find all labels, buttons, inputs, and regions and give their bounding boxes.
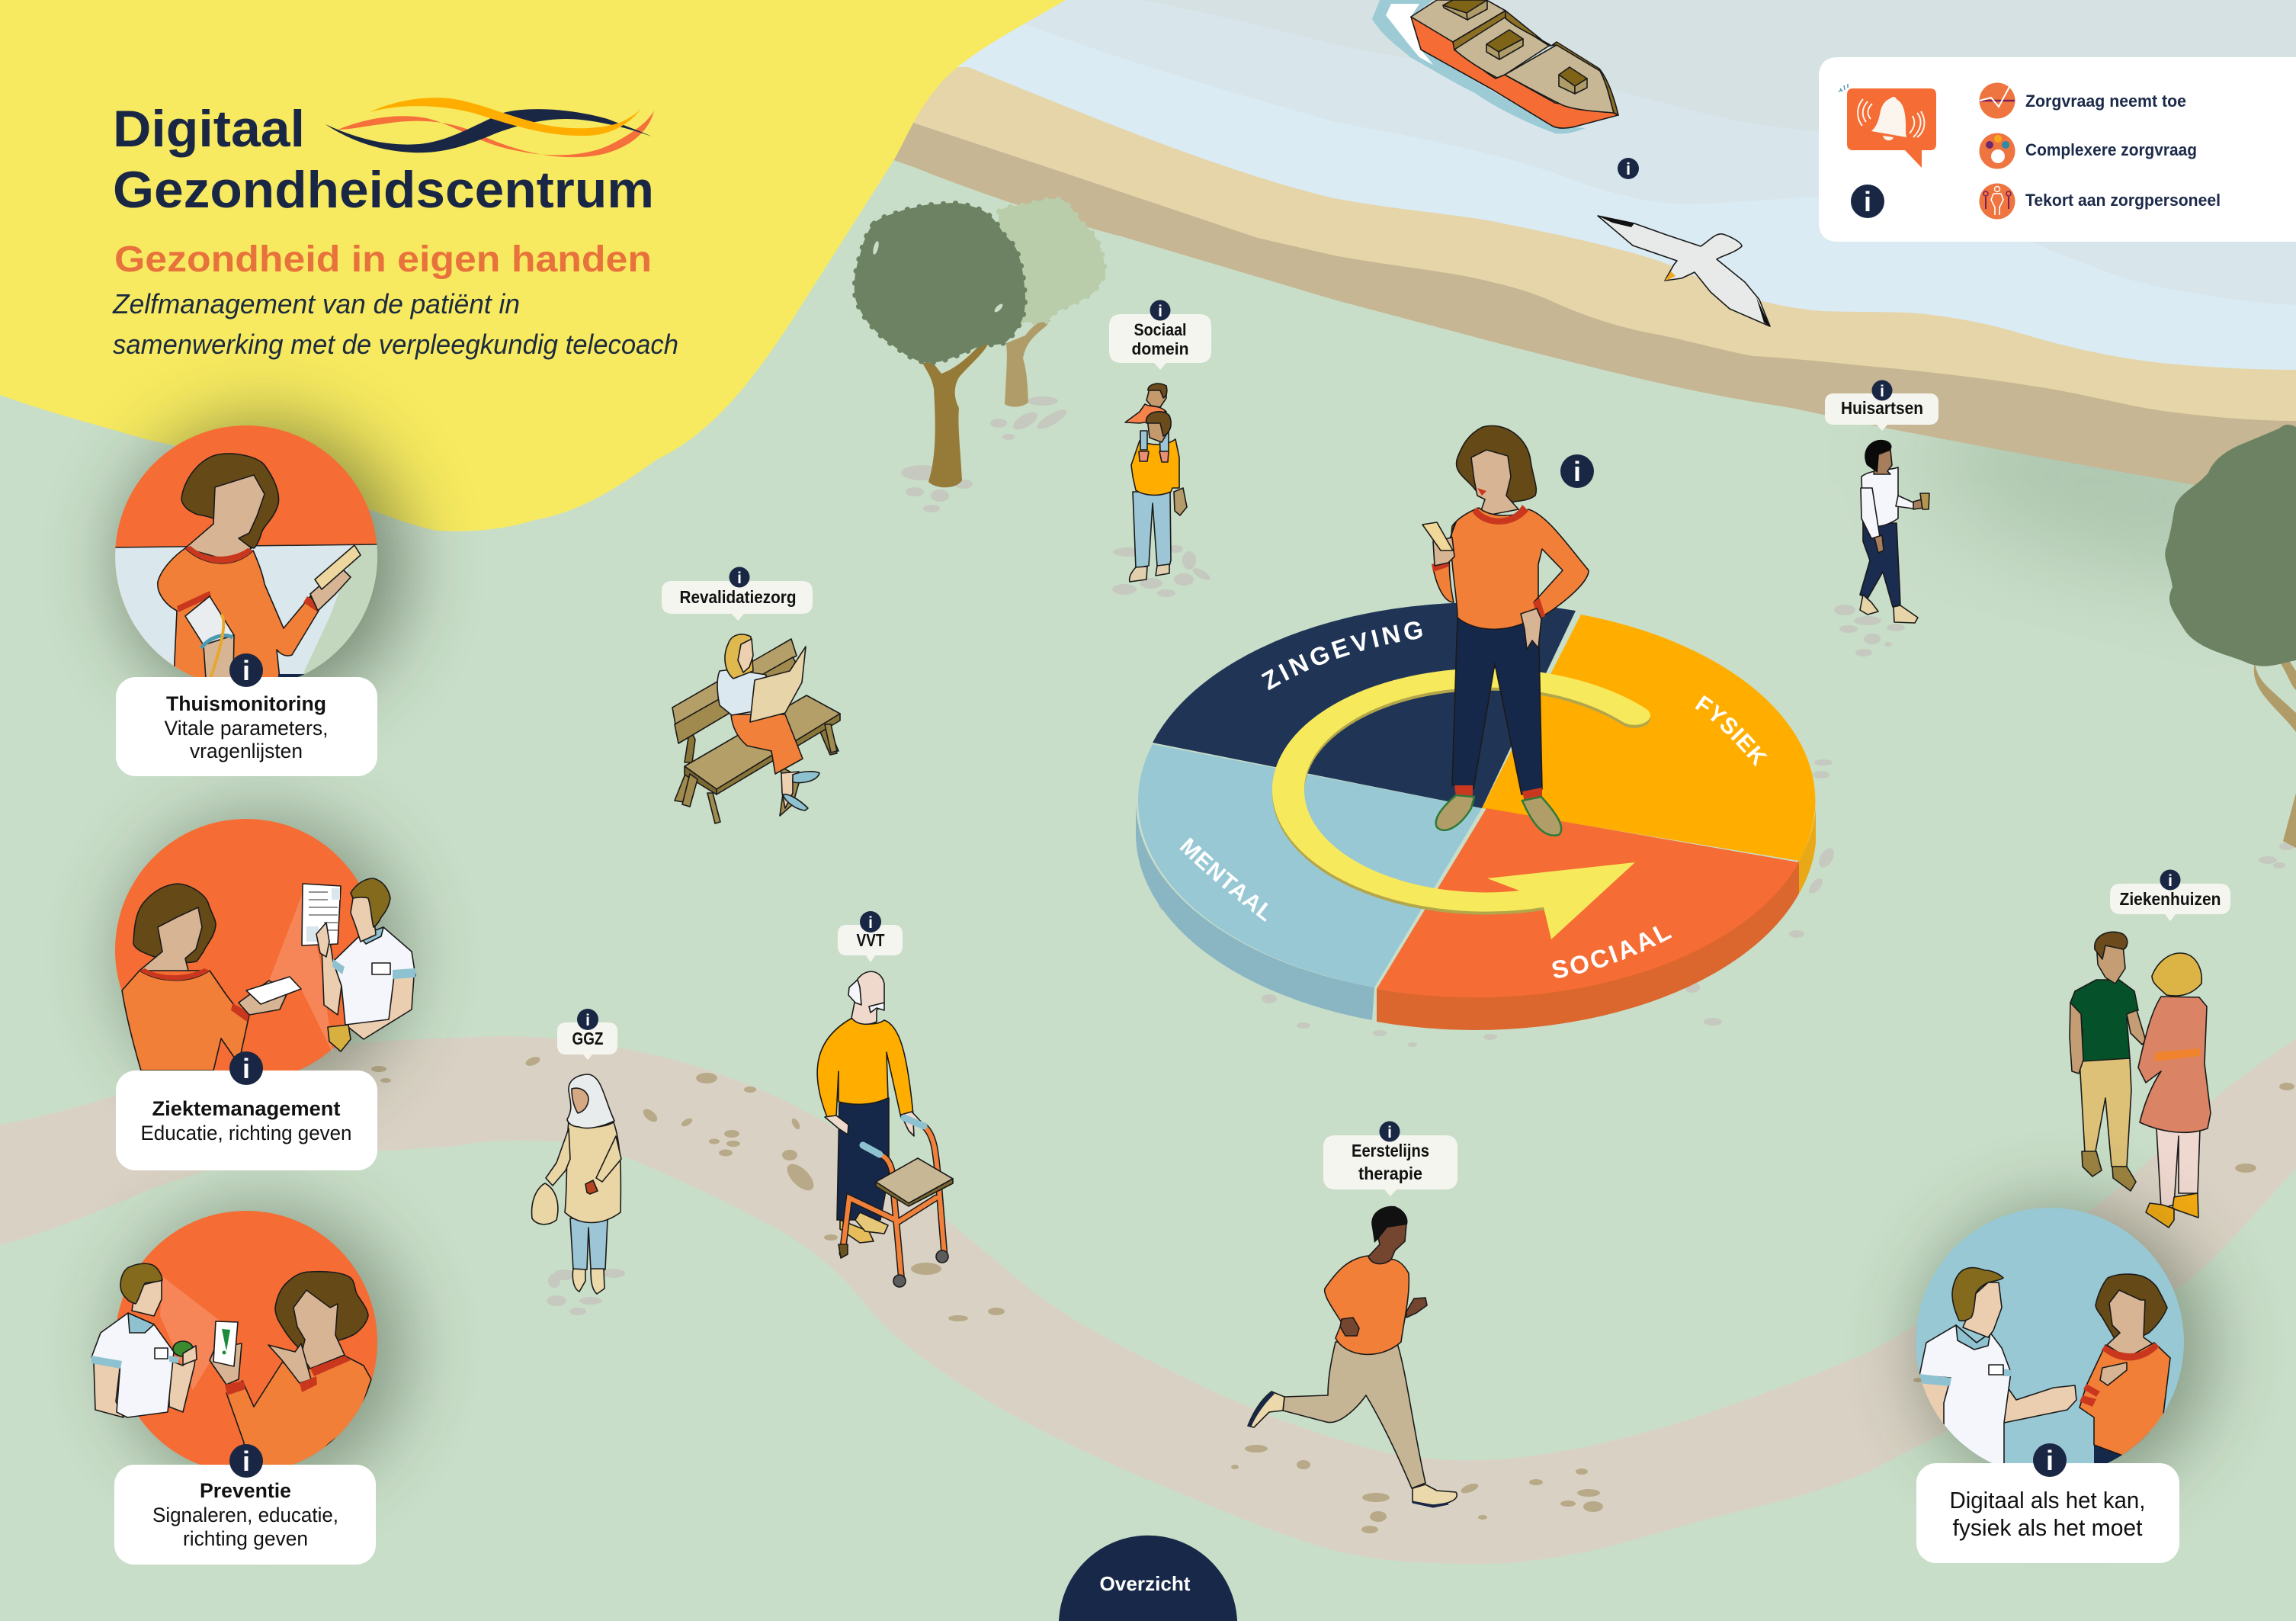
label: huisartsen: [1825, 380, 1938, 431]
shadow: preventie: [122, 1209, 404, 1491]
card heading: Ziektemanagement: [152, 1097, 340, 1120]
nurse: [1919, 1268, 2076, 1468]
panel: preventie: [91, 1211, 377, 1565]
segment: zingeving: [1153, 602, 1576, 808]
card text: Vitale parameters,: [165, 717, 328, 740]
overzicht button: [1059, 1536, 1237, 1621]
label: sociaal domein: domein: [1131, 339, 1189, 358]
figure: couple, man and woman: [2070, 932, 2211, 1228]
label: eerstelijns therapie: [1323, 1121, 1457, 1196]
tree: back tree light: [999, 199, 1105, 407]
tagline line 1: Zelfmanagement van de patiënt in: [112, 288, 520, 319]
label: ggz: [557, 1009, 617, 1060]
arrow head: [1487, 862, 1635, 939]
label: eerstelijns therapie: Eerstelijns: [1352, 1141, 1429, 1160]
label: eerstelijns therapie: i: [1387, 1124, 1392, 1141]
newspaper: [750, 647, 806, 722]
main woman on disk: [1422, 425, 1589, 836]
legend text 1: Zorgvraag neemt toe: [2025, 91, 2186, 111]
info badge: [229, 1051, 263, 1085]
label: ziekenhuizen: Ziekenhuizen: [2119, 889, 2221, 909]
walker: [842, 1118, 944, 1282]
card text: Digitaal als het kan,: [1950, 1487, 2145, 1513]
bench: [672, 639, 840, 823]
nurse: [302, 878, 415, 1051]
legend text 3: Tekort aan zorgpersoneel: [2025, 191, 2221, 210]
card text line 2: vragenlijsten: [190, 740, 303, 762]
circle: [1916, 1208, 2184, 1476]
card heading: Preventie: [200, 1479, 291, 1502]
pie disk: [1136, 602, 1816, 1030]
segment: mentaal: [1138, 744, 1482, 987]
circle: [115, 819, 377, 1081]
label: ggz: i: [585, 1012, 590, 1029]
hair and face: [725, 634, 753, 679]
label: revalidatiezorg: [662, 567, 813, 621]
figure: elderly man with walker: [817, 971, 953, 1287]
figure: woman walking with cup: [1860, 440, 1929, 623]
figure: parent with child on shoulders: [1125, 384, 1187, 582]
info badge: i: [242, 1446, 250, 1477]
label: mentaal: MENTAAL: [1179, 837, 1268, 922]
info badge: [229, 653, 263, 687]
logo title: [112, 98, 678, 360]
info badge: [229, 1444, 263, 1478]
subheading: Gezondheid in eigen handen: [114, 239, 652, 280]
light beam: [269, 893, 333, 1054]
seagull: [1598, 216, 1770, 326]
yellow title background shape: [0, 0, 1066, 531]
heading line 2: Gezondheidscentrum: [113, 161, 654, 219]
shoes: [1436, 795, 1474, 830]
info badge: main woman: i: [1573, 456, 1581, 487]
woman: [2157, 1128, 2200, 1209]
label: sociaal domein: Sociaal: [1134, 320, 1186, 339]
figure: woman with headscarf and bag: [532, 1074, 621, 1294]
card text line 2: richting geven: [183, 1527, 308, 1550]
hand on hip: [1521, 608, 1541, 650]
tagline line 2: samenwerking met de verpleegkundig telecoach: [113, 329, 678, 360]
segment: sociaal: [1377, 808, 1799, 997]
logo swoosh: [325, 98, 654, 157]
man: [2080, 1058, 2131, 1167]
overzicht button: Overzicht: [1099, 1572, 1191, 1595]
legend panel: [1819, 57, 2296, 242]
card text line 2: fysiek als het moet: [1953, 1514, 2143, 1541]
text card: [114, 1465, 376, 1565]
info badge: i: [242, 1053, 250, 1084]
label: huisartsen: i: [1880, 383, 1884, 400]
panel: digitaal als het kan: [1916, 1208, 2184, 1563]
label: ggz: GGZ: [572, 1029, 604, 1048]
label: vvt: [838, 911, 903, 962]
panel: ziektemanagement: [115, 819, 415, 1170]
label: vvt: VVT: [857, 930, 884, 950]
heading line 1: Digitaal: [113, 100, 305, 158]
pebbles on the path: [371, 1055, 2294, 1533]
text card: [116, 677, 377, 776]
icon: care demand chart: [1979, 82, 2015, 119]
card heading: Thuismonitoring: [166, 692, 326, 715]
card text: Signaleren, educatie,: [152, 1504, 338, 1526]
boat: [1372, 0, 1618, 133]
nurse: [91, 1263, 197, 1417]
card text: Educatie, richting geven: [140, 1122, 352, 1144]
ring arrow: [1288, 678, 1634, 902]
label: vvt: i: [868, 914, 873, 932]
shadow: thuismonitoring: [122, 423, 404, 705]
skirt and legs: [781, 772, 799, 808]
info badge: i: [242, 655, 250, 686]
shadow: ziektemanagement: [122, 817, 404, 1099]
label: revalidatiezorg: i: [737, 570, 742, 587]
socks: [1454, 785, 1542, 802]
tree: front tree dark: [855, 203, 1025, 487]
icon: staff shortage: [1979, 183, 2015, 220]
panel: thuismonitoring: [114, 425, 377, 776]
ring arrow shadow: [1288, 681, 1634, 905]
icon: alert bell speech bubble: [1839, 84, 1936, 168]
info badge: boat: i: [1626, 159, 1631, 178]
figure: jogger: [1248, 1206, 1457, 1507]
text card: [1916, 1463, 2179, 1563]
patient: [210, 1272, 371, 1468]
info badge: i: [1864, 186, 1871, 217]
legend text 2: Complexere zorgvraag: [2025, 140, 2197, 159]
light beam: [160, 1276, 219, 1390]
label: sociaal domein: i: [1158, 303, 1162, 320]
icon: puzzle pieces: [1979, 133, 2015, 169]
info badge: i: [2046, 1445, 2054, 1476]
patient: [2080, 1274, 2170, 1468]
label: sociaal: SOCIAAL: [1552, 926, 1672, 978]
grey pebbles on the grass: [547, 396, 2294, 1315]
label: zingeving: ZINGEVING: [1261, 621, 1422, 691]
footpath: [0, 1036, 2296, 1564]
info badge: main woman: [1560, 454, 1594, 488]
torso and arms: [1451, 508, 1589, 629]
label: ziekenhuizen: [2110, 869, 2230, 921]
patient: [122, 884, 301, 1071]
label: ziekenhuizen: i: [2168, 872, 2173, 890]
label: huisartsen: Huisartsen: [1841, 398, 1923, 418]
circle: [115, 1211, 377, 1473]
circle illustration: [114, 425, 377, 689]
hand with phone: [1433, 538, 1454, 566]
disk sides: [1136, 797, 1374, 1020]
info badge: [2033, 1443, 2067, 1477]
label: revalidatiezorg: Revalidatiezorg: [680, 587, 796, 607]
figure: woman on bench reading newspaper: [672, 634, 840, 823]
segment: fysiek: [1482, 615, 1815, 861]
tree: right edge: [2165, 425, 2296, 848]
label: sociaal domein: [1109, 300, 1211, 370]
trousers: [1452, 613, 1542, 794]
blouse: [717, 669, 766, 715]
label: fysiek: FYSIEK: [1695, 695, 1768, 767]
info badge: boat: [1618, 158, 1639, 179]
label: eerstelijns therapie: therapie: [1358, 1164, 1422, 1183]
tree shadow on grass: [1922, 436, 2195, 597]
shadow: digitaal als het kan: [1922, 1206, 2208, 1493]
info badge: [1851, 185, 1884, 218]
text card: [116, 1071, 377, 1170]
